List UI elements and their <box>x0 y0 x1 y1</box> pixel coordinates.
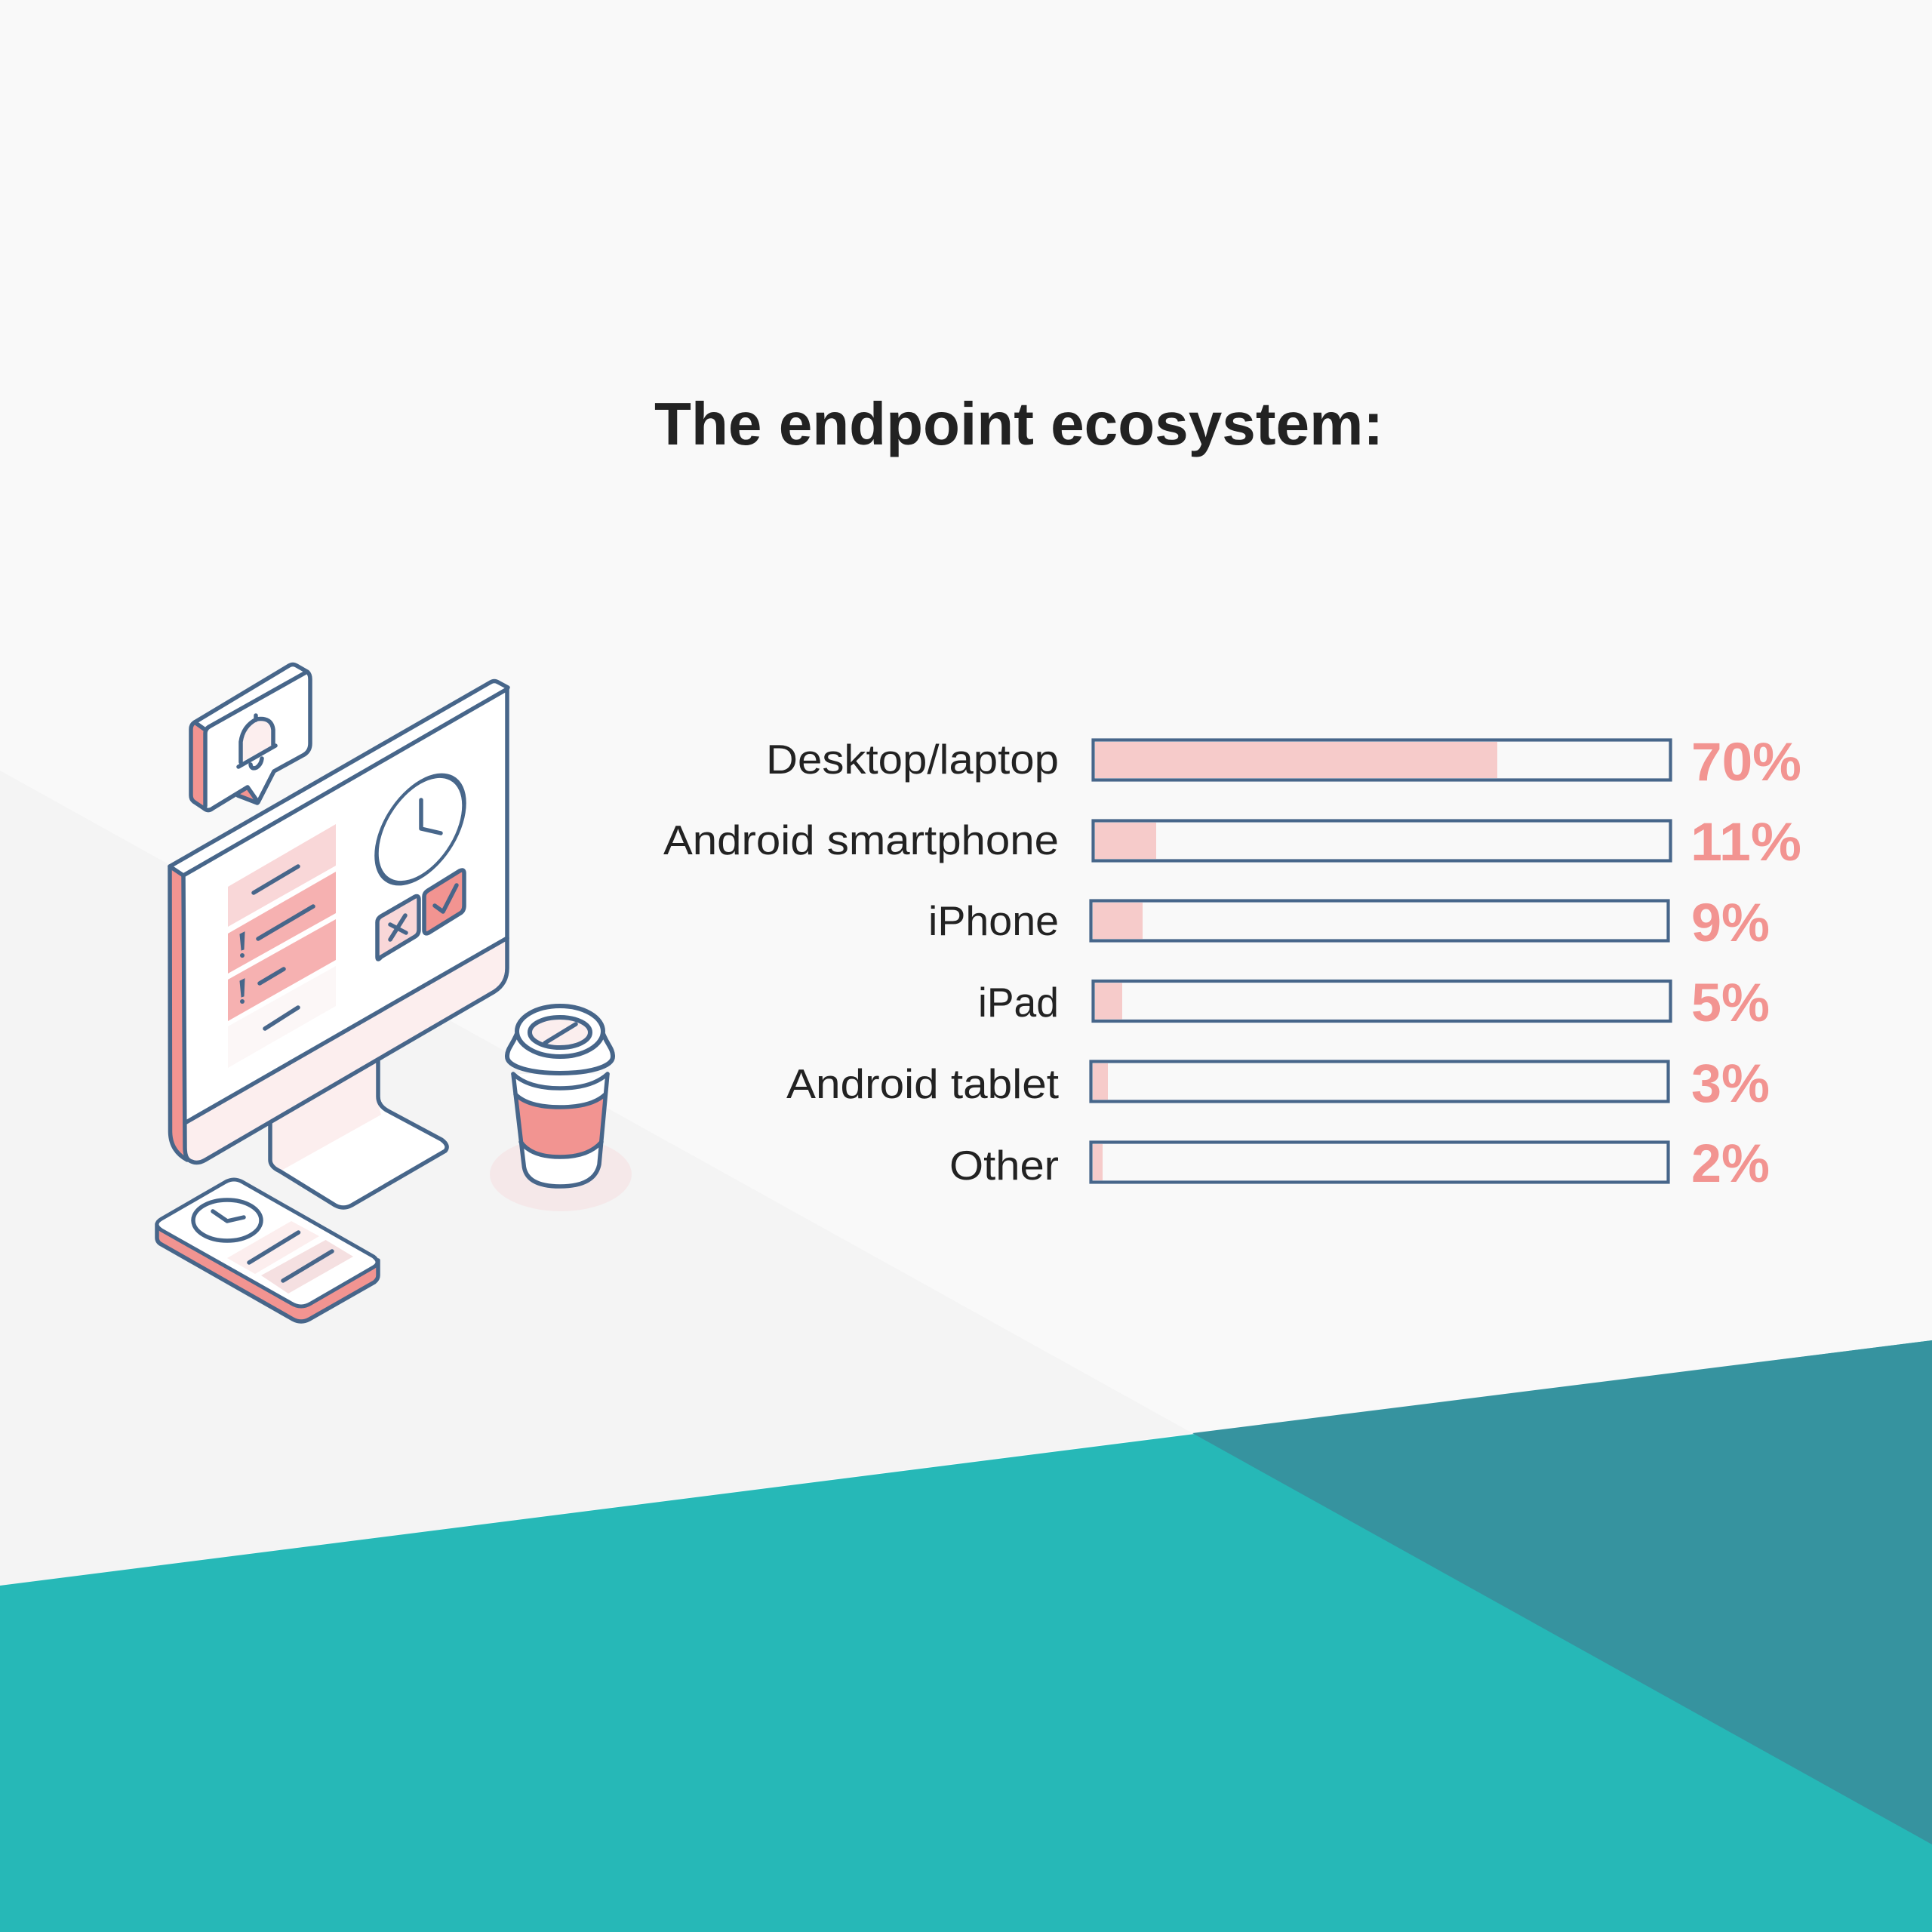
icon: coffee cup <box>507 1006 613 1186</box>
screen approve box <box>424 870 464 934</box>
teal floor band <box>0 1340 1932 1932</box>
icon: monitor stand <box>270 1049 447 1208</box>
icon: smartphone <box>157 1180 378 1321</box>
row: Desktop/laptop <box>766 733 1801 792</box>
row: iPhone: 9% <box>1691 894 1770 953</box>
row: Android tablet <box>786 1054 1770 1114</box>
row: Other: Other <box>949 1142 1059 1189</box>
illustration: workstation <box>157 664 632 1321</box>
screen clock <box>377 757 464 902</box>
icon: coffee cup shadow <box>490 1137 632 1211</box>
screen reject box <box>377 897 419 959</box>
row: Other <box>949 1134 1770 1194</box>
monitor side <box>170 866 185 1158</box>
row: Android smartphone: 11% <box>1690 813 1801 872</box>
row: Android smartphone: Android smartphone <box>663 817 1059 863</box>
row: Desktop/laptop: Desktop/laptop <box>766 736 1059 783</box>
monitor top edge <box>170 681 508 875</box>
bar chart <box>663 733 1801 1194</box>
row: iPhone <box>928 894 1770 953</box>
icon: notification bubble <box>191 664 310 811</box>
row: Desktop/laptop: 70% <box>1691 733 1801 792</box>
row: Android tablet: 3% <box>1691 1054 1770 1114</box>
row: iPhone: iPhone <box>928 897 1059 944</box>
monitor screen <box>183 689 507 1123</box>
bell <box>238 715 275 768</box>
screen list rows <box>228 824 336 1068</box>
row: Other: 2% <box>1691 1134 1770 1194</box>
monitor chin <box>185 938 507 1162</box>
row: iPad <box>978 974 1770 1033</box>
row: iPad: 5% <box>1691 974 1770 1033</box>
row: Android smartphone <box>663 813 1801 872</box>
row: Android tablet: Android tablet <box>786 1060 1059 1107</box>
icon: monitor <box>170 681 508 1162</box>
dark teal triangle <box>1192 1340 1932 1844</box>
title: The endpoint ecosystem: <box>654 390 1383 457</box>
row: iPad: iPad <box>978 979 1059 1026</box>
